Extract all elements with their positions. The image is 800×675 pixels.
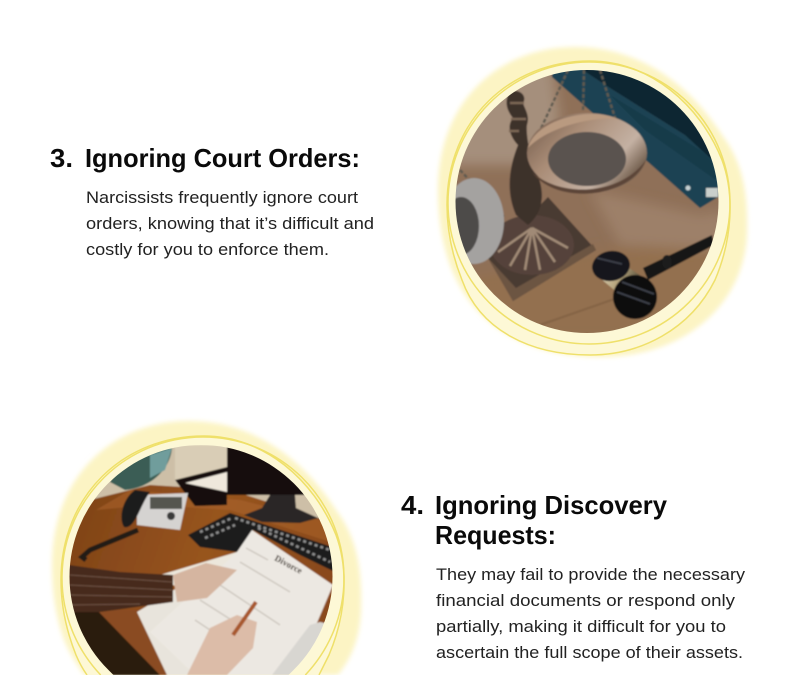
lower paper <box>272 620 324 675</box>
body text: court orders: costly for you to enforce them. <box>86 240 329 259</box>
photo: wood desk, scales, gavel, binder <box>456 70 718 333</box>
desk front shadow <box>74 611 160 675</box>
lower hand <box>187 615 257 675</box>
body text: discovery requests: They may fail to provide the necessary <box>436 565 746 584</box>
scale base <box>488 196 592 288</box>
photo: desk with phone, keyboard, monitor and divorce paper: Divorce <box>273 553 304 576</box>
body text: discovery requests <box>436 565 746 662</box>
image: scales of justice and gavel in yellow ring <box>438 47 747 357</box>
body text: court orders: orders, knowing that it’s difficult and <box>86 214 374 233</box>
gavel <box>643 235 714 280</box>
decoration: pale yellow blob and rings <box>52 421 361 675</box>
left pan <box>456 177 505 265</box>
body text: discovery requests: financial documents or respond only <box>436 591 736 610</box>
heading: 4. Ignoring Discovery Requests: Requests: <box>435 520 556 550</box>
papers <box>136 588 190 675</box>
heading: 4. Ignoring Discovery Requests <box>401 490 668 550</box>
binder <box>552 65 725 208</box>
heading: 4. Ignoring Discovery Requests: 4. <box>401 490 424 520</box>
heading: 3. Ignoring Court Orders: Ignoring Court Orders: <box>85 143 360 173</box>
photo: desk with phone, keyboard, monitor and divorce paper <box>65 445 340 675</box>
upper pan <box>527 113 647 193</box>
globe <box>110 448 172 490</box>
scale column <box>507 91 542 225</box>
monitor <box>227 445 310 495</box>
keyboard <box>188 513 335 572</box>
decoration: pale yellow blob and rings <box>438 47 747 357</box>
body text: discovery requests: ascertain the full scope of their assets. <box>436 643 743 662</box>
heading: 4. Ignoring Discovery Requests: Ignoring Discovery <box>435 490 668 520</box>
body text: discovery requests: partially, making it difficult for you to <box>436 617 726 636</box>
image: hands reviewing divorce paper at desk in yellow ring <box>52 421 361 675</box>
section 4: text block <box>401 490 746 662</box>
upper hand <box>173 563 237 602</box>
pen <box>233 602 256 635</box>
telephone <box>137 493 188 530</box>
body text: court orders: Narcissists frequently ignore court <box>86 188 358 207</box>
chains <box>459 70 617 178</box>
section 3: text block <box>50 143 374 259</box>
sleeve <box>69 565 173 612</box>
body text: court orders <box>86 188 374 259</box>
heading: 3. Ignoring Court Orders: 3. <box>50 143 73 173</box>
